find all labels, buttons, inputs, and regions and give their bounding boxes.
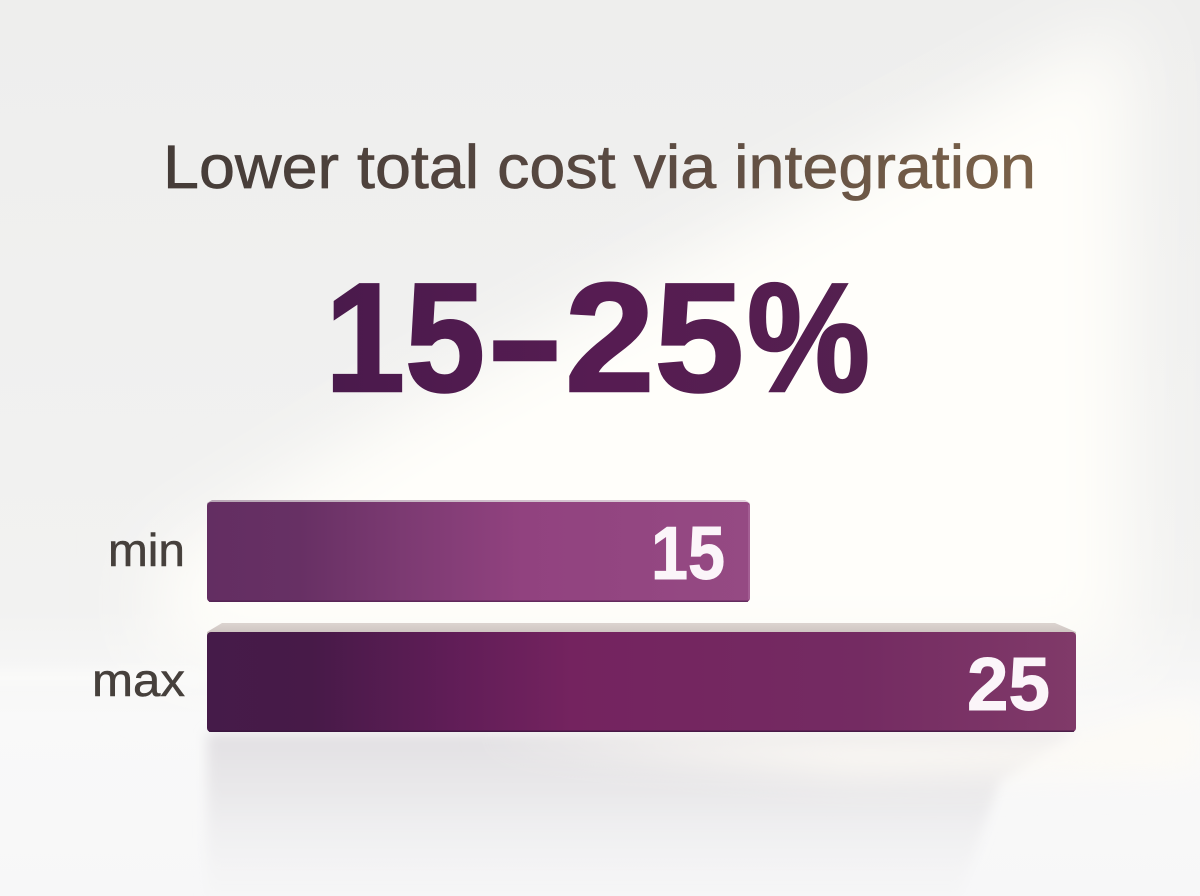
bar: min (207, 500, 750, 602)
headline figure: 15-25%: - (486, 251, 564, 424)
bar: min: 15 (651, 511, 725, 595)
headline figure: 15-25%: % (747, 251, 870, 424)
bar: max (207, 623, 1076, 732)
headline figure: 15-25% (325, 251, 870, 424)
headline figure: 15-25%: 25 (565, 251, 744, 424)
bar chart: min and max (92, 500, 1076, 732)
label: min: min (108, 524, 185, 576)
title: Lower total cost via integration (163, 133, 1036, 201)
bar: max: 25 (967, 642, 1050, 726)
headline figure: 15-25%: 15 (325, 251, 485, 424)
label: max: max (92, 654, 185, 706)
